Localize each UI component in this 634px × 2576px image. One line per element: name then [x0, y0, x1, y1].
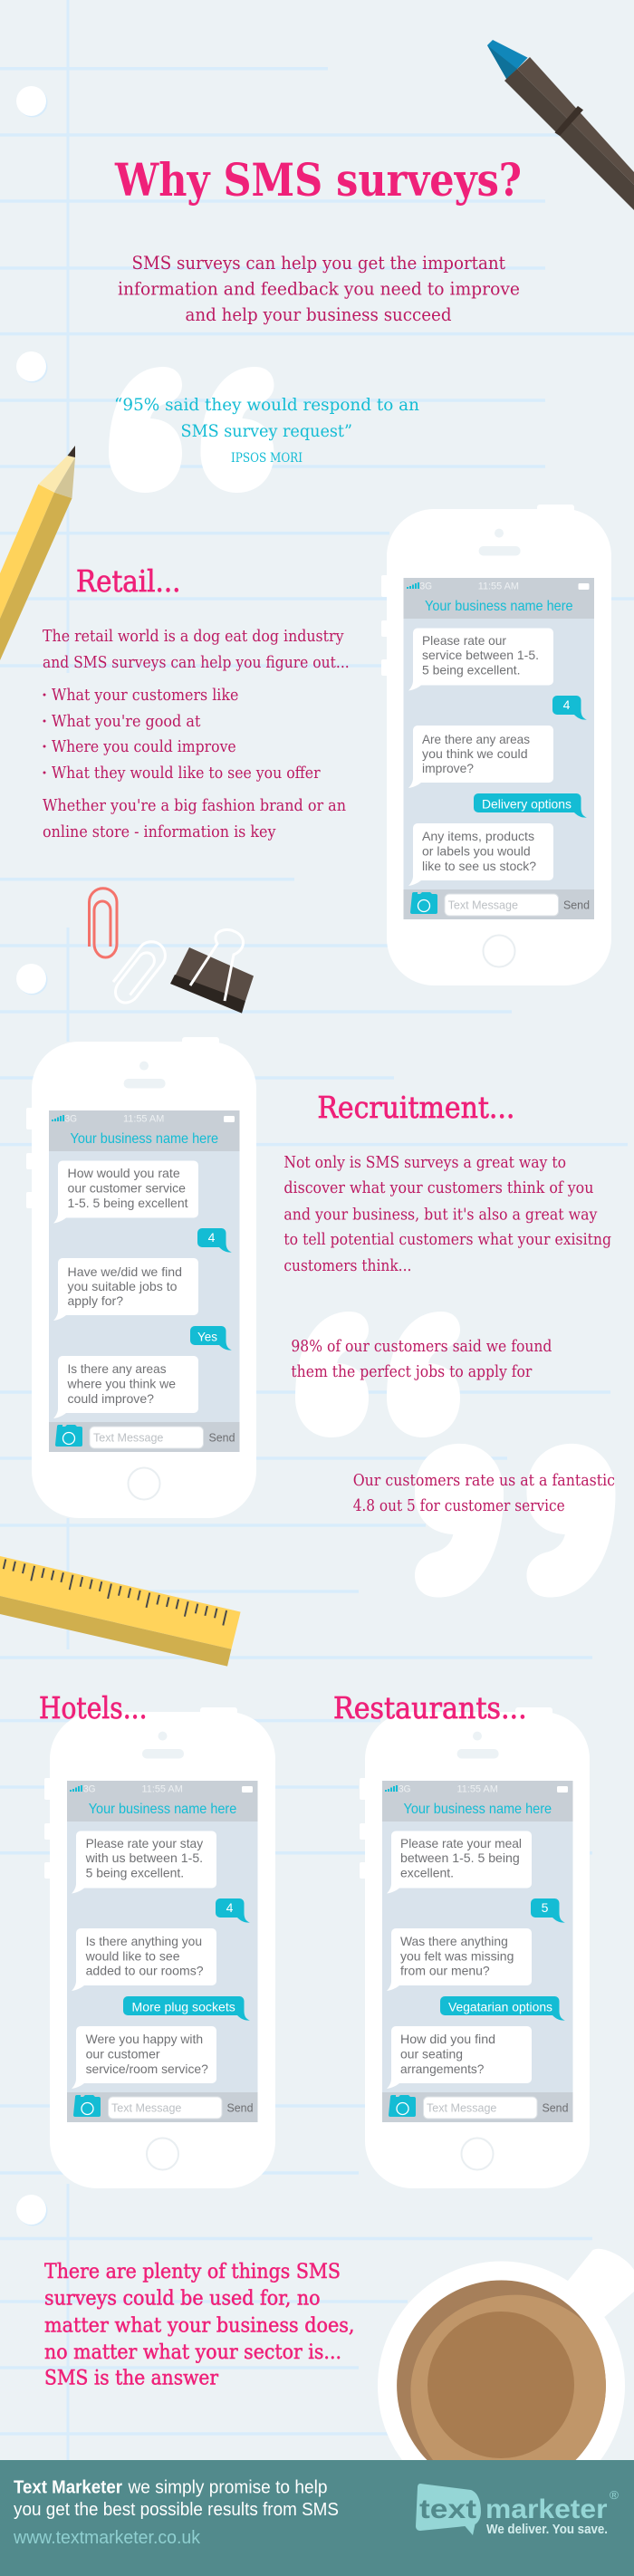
message — [53, 1161, 198, 1223]
message: or labels you would — [422, 844, 531, 859]
message: with us between 1-5. — [85, 1850, 203, 1865]
status bar — [52, 1114, 235, 1125]
reply — [531, 1898, 565, 1923]
status bar: 3G — [420, 582, 432, 592]
message — [408, 726, 553, 788]
message: added to our rooms? — [86, 1964, 204, 1978]
reply: More plug sockets — [132, 2000, 235, 2014]
footer text — [13, 2477, 339, 2548]
footer text: Text Marketer — [14, 2477, 122, 2497]
message: apply for? — [67, 1293, 123, 1308]
status bar — [407, 582, 589, 592]
heading: recruitment: Recruitment... — [317, 1090, 514, 1125]
status bar — [70, 1784, 253, 1795]
quote: jobs: 98% of our customers said we found — [291, 1337, 552, 1356]
message: our customer service — [67, 1181, 186, 1196]
recruitment text: and your business, but it's also a great way — [283, 1205, 598, 1224]
icon: pen — [487, 40, 634, 210]
closing statement: surveys could be used for, no — [44, 2288, 321, 2311]
quote: Ipsos Mori: SMS survey request” — [181, 422, 352, 441]
logo: text marketer: We deliver. You save. — [486, 2522, 608, 2537]
message: where you think we — [67, 1377, 176, 1391]
phone: restaurants — [360, 1707, 590, 2188]
input bar: Text Message — [93, 1431, 163, 1445]
quote: rating: 4.8 out 5 for customer service — [353, 1496, 565, 1515]
message: our seating — [400, 2047, 463, 2062]
recruitment text: Not only is SMS surveys a great way to — [283, 1153, 566, 1172]
reply: 4 — [208, 1230, 216, 1245]
message: 5 being excellent. — [422, 663, 520, 678]
message: improve? — [422, 761, 474, 775]
recruitment text: discover what your customers think of you — [283, 1178, 593, 1197]
input bar: Text Message — [448, 899, 518, 912]
intro text: information and feedback you need to improve — [118, 278, 520, 300]
message — [408, 629, 553, 690]
status bar: 11:55 AM — [478, 582, 519, 592]
message: Are there any areas — [422, 732, 530, 746]
message — [387, 1928, 532, 1991]
reply — [552, 696, 587, 720]
intro text — [118, 252, 520, 325]
icon: coffee cup — [378, 2249, 634, 2511]
status bar: 11:55 AM — [141, 1784, 183, 1795]
quote: jobs: them the perfect jobs to apply for — [291, 1362, 533, 1381]
recruitment text — [283, 1153, 611, 1275]
reply — [190, 1326, 232, 1350]
heading: retail: Retail... — [76, 563, 181, 599]
message: you felt was missing — [400, 1949, 514, 1964]
business name: Your business name here — [425, 599, 573, 614]
message: our customer — [86, 2047, 160, 2062]
business name: Your business name here — [71, 1131, 218, 1147]
closing statement: There are plenty of things SMS — [44, 2261, 341, 2283]
quote: jobs — [291, 1337, 552, 1381]
input bar: Send — [563, 899, 590, 912]
input bar: Send — [208, 1431, 235, 1445]
closing statement: no matter what your sector is... — [44, 2341, 341, 2364]
message: Was there anything — [400, 1934, 508, 1948]
phone: recruitment — [26, 1037, 256, 1518]
intro text: SMS surveys can help you get the important — [132, 252, 505, 274]
icon: white paperclip — [107, 936, 171, 1007]
message: Please rate our — [422, 633, 506, 648]
message: you think we could — [422, 746, 528, 761]
closing statement — [44, 2261, 355, 2390]
bullet list: What your customers like — [52, 686, 238, 705]
logo: text marketer: ® — [610, 2488, 619, 2502]
intro text: and help your business succeed — [185, 303, 452, 325]
input bar — [55, 1425, 235, 1448]
status bar: 11:55 AM — [456, 1784, 498, 1795]
message: service/room service? — [86, 2062, 208, 2076]
footer text: www.textmarketer.co.uk — [13, 2528, 201, 2548]
message: would like to see — [85, 1949, 180, 1964]
reply — [216, 1898, 250, 1923]
reply: Vegatarian options — [448, 2000, 552, 2014]
input bar: Send — [226, 2101, 254, 2115]
message: How did you find — [400, 2032, 495, 2046]
quote: Ipsos Mori: IPSOS MORI — [231, 451, 303, 466]
closing statement: matter what your business does, — [44, 2315, 355, 2338]
message: Have we/did we find — [67, 1264, 182, 1279]
message: 5 being excellent. — [86, 1866, 184, 1880]
input bar: Send — [542, 2101, 569, 2115]
reply — [197, 1228, 232, 1253]
icon: opening quote marks — [295, 1312, 460, 1437]
logo: text marketer: text — [419, 2494, 476, 2524]
status bar: 11:55 AM — [123, 1114, 164, 1125]
heading: restaurants: Restaurants... — [333, 1690, 527, 1725]
reply — [123, 1996, 250, 2021]
bullet list: Where you could improve — [52, 737, 236, 756]
message: like to see us stock? — [422, 859, 536, 873]
bullet list: What they would like to see you offer — [52, 764, 321, 783]
reply — [474, 793, 587, 818]
message: from our menu? — [400, 1964, 490, 1978]
reply: Delivery options — [482, 797, 572, 812]
punched hole 3 — [16, 964, 47, 995]
quote: rating — [353, 1471, 615, 1515]
icon: ruler — [0, 1556, 241, 1667]
message: could improve? — [67, 1391, 154, 1406]
message — [408, 823, 553, 886]
status bar: 3G — [399, 1784, 411, 1795]
message — [53, 1258, 198, 1321]
footer band — [0, 2460, 634, 2576]
icon: red paperclip — [89, 889, 117, 957]
business name: Your business name here — [404, 1802, 552, 1817]
message — [72, 1831, 216, 1893]
logo: text marketer — [416, 2484, 619, 2537]
input bar — [73, 2095, 254, 2119]
bullet list: What you're good at — [52, 712, 201, 731]
message: How would you rate — [67, 1166, 180, 1180]
message — [72, 1928, 216, 1991]
closing statement: SMS is the answer — [44, 2368, 218, 2390]
reply: 4 — [563, 697, 571, 712]
reply — [440, 1996, 565, 2021]
retail text: The retail world is a dog eat dog industry — [43, 627, 344, 646]
retail text: Whether you're a big fashion brand or an — [43, 796, 346, 815]
message: you suitable jobs to — [67, 1279, 178, 1293]
footer text: you get the best possible results from SMS — [14, 2500, 339, 2520]
quote: Ipsos Mori: “95% said they would respond to an — [114, 396, 419, 415]
message — [53, 1356, 198, 1418]
message: excellent. — [400, 1866, 454, 1880]
punched hole 2 — [16, 351, 47, 382]
quote: Ipsos Mori — [114, 396, 419, 466]
icon: closing quote marks — [415, 1444, 616, 1598]
message: between 1-5. 5 being — [400, 1850, 520, 1865]
reply: 5 — [542, 1900, 549, 1915]
status bar — [385, 1784, 568, 1795]
logo: text marketer: marketer — [485, 2494, 608, 2524]
message: 1-5. 5 being excellent — [67, 1196, 188, 1210]
recruitment text: customers think... — [283, 1256, 411, 1275]
heading: hotels: Hotels... — [39, 1690, 147, 1725]
message: Please rate your meal — [400, 1836, 522, 1850]
reply: 4 — [226, 1900, 234, 1915]
phone: retail — [381, 505, 611, 985]
input bar: Text Message — [111, 2101, 181, 2115]
status bar: 3G — [65, 1114, 77, 1125]
message: arrangements? — [400, 2062, 485, 2076]
reply: Yes — [197, 1330, 217, 1344]
message — [387, 2026, 532, 2089]
icon: binder clip — [170, 930, 254, 1014]
bullet list — [43, 686, 321, 783]
business name: Your business name here — [89, 1802, 236, 1817]
input bar: Text Message — [427, 2101, 496, 2115]
retail text: online store - information is key — [43, 822, 276, 841]
input bar — [389, 2095, 569, 2119]
phone: hotels — [44, 1707, 275, 2188]
title: Why SMS surveys? — [114, 153, 522, 207]
icon: pencil — [0, 446, 75, 660]
icon: opening quote marks — [109, 367, 274, 493]
punched hole 4 — [16, 2195, 47, 2226]
punched hole 1 — [16, 86, 47, 118]
message: Were you happy with — [86, 2032, 203, 2046]
footer text: we simply promise to help — [128, 2477, 328, 2497]
message: Any items, products — [422, 829, 534, 843]
message — [72, 2026, 216, 2089]
message: Is there anything you — [86, 1934, 202, 1948]
input bar — [410, 892, 590, 916]
status bar: 3G — [83, 1784, 96, 1795]
retail text — [43, 627, 350, 841]
message: Please rate your stay — [86, 1836, 203, 1850]
message — [387, 1831, 532, 1893]
message: service between 1-5. — [422, 648, 539, 662]
message: Is there any areas — [67, 1361, 167, 1376]
retail text: and SMS surveys can help you figure out... — [43, 653, 350, 672]
